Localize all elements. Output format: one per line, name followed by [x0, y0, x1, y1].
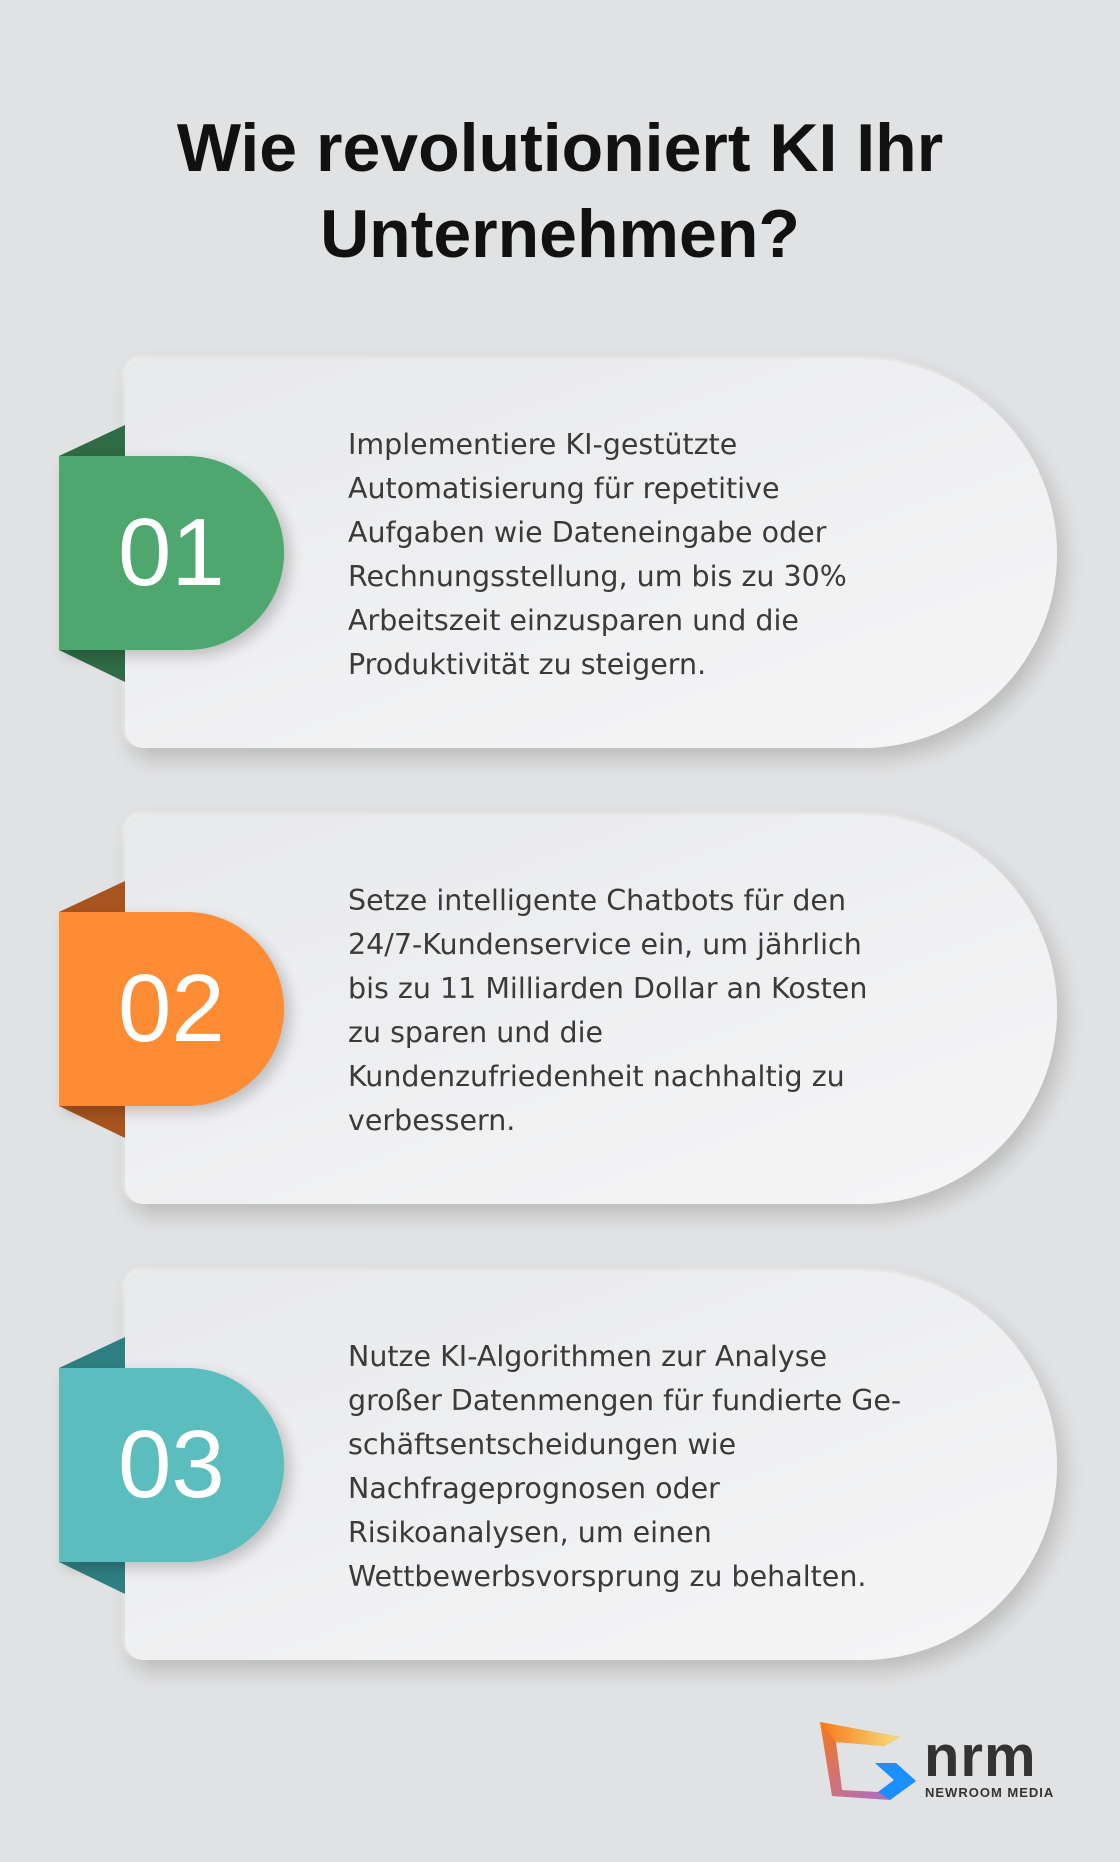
logo: NEWROOM MEDIA	[925, 1785, 1054, 1800]
text: step 2: zu sparen und die	[348, 1016, 603, 1049]
text: step 1: Produktivität zu steigern.	[348, 648, 706, 681]
logo	[820, 1722, 1054, 1800]
text: step 1: Arbeitszeit einzusparen und die	[348, 604, 799, 637]
text: step 1	[348, 428, 847, 681]
text: step 2	[348, 884, 867, 1137]
text: step 2: Setze intelligente Chatbots für den	[348, 884, 846, 917]
fold: step 1	[59, 425, 125, 682]
text: step 3: Risikoanalysen, um einen	[348, 1516, 712, 1549]
icon: logo mark	[820, 1722, 916, 1800]
text: step 1: Aufgaben wie Dateneingabe oder	[348, 516, 826, 549]
title: Unternehmen?	[320, 196, 800, 272]
panel: step 3	[125, 1271, 1057, 1660]
badge: 02	[59, 912, 284, 1106]
fold: step 3	[59, 1337, 125, 1594]
badge: 01: 01	[118, 499, 225, 606]
badge: 01	[59, 456, 284, 650]
badge: 03	[59, 1368, 284, 1562]
badge: 03: 03	[118, 1411, 225, 1518]
text: step 3: schäftsentscheidungen wie	[348, 1428, 736, 1461]
text: step 3: Nachfrageprognosen oder	[348, 1472, 720, 1505]
panel: step 1	[125, 359, 1057, 748]
title: Wie revolutioniert KI Ihr	[177, 110, 943, 186]
text: step 3: großer Datenmengen für fundierte Ge-	[348, 1384, 901, 1417]
text: step 1: Implementiere KI-gestützte	[348, 428, 737, 461]
text: step 2: 24/7-Kundenservice ein, um jährlich	[348, 928, 862, 961]
text: step 2: verbessern.	[348, 1104, 515, 1137]
logo text: nrm	[924, 1724, 1037, 1789]
badge: 02: 02	[118, 955, 225, 1062]
text: step 3: Wettbewerbsvorsprung zu behalten.	[348, 1560, 866, 1593]
text: step 1: Automatisierung für repetitive	[348, 472, 780, 505]
text: step 2: Kundenzufriedenheit nachhaltig zu	[348, 1060, 845, 1093]
title	[177, 110, 943, 272]
fold: step 2	[59, 881, 125, 1138]
text: step 1: Rechnungsstellung, um bis zu 30%	[348, 560, 847, 593]
text: step 3	[348, 1340, 901, 1593]
panel: step 2	[125, 815, 1057, 1204]
text: step 3: Nutze KI-Algorithmen zur Analyse	[348, 1340, 827, 1373]
text: step 2: bis zu 11 Milliarden Dollar an Kosten	[348, 972, 867, 1005]
